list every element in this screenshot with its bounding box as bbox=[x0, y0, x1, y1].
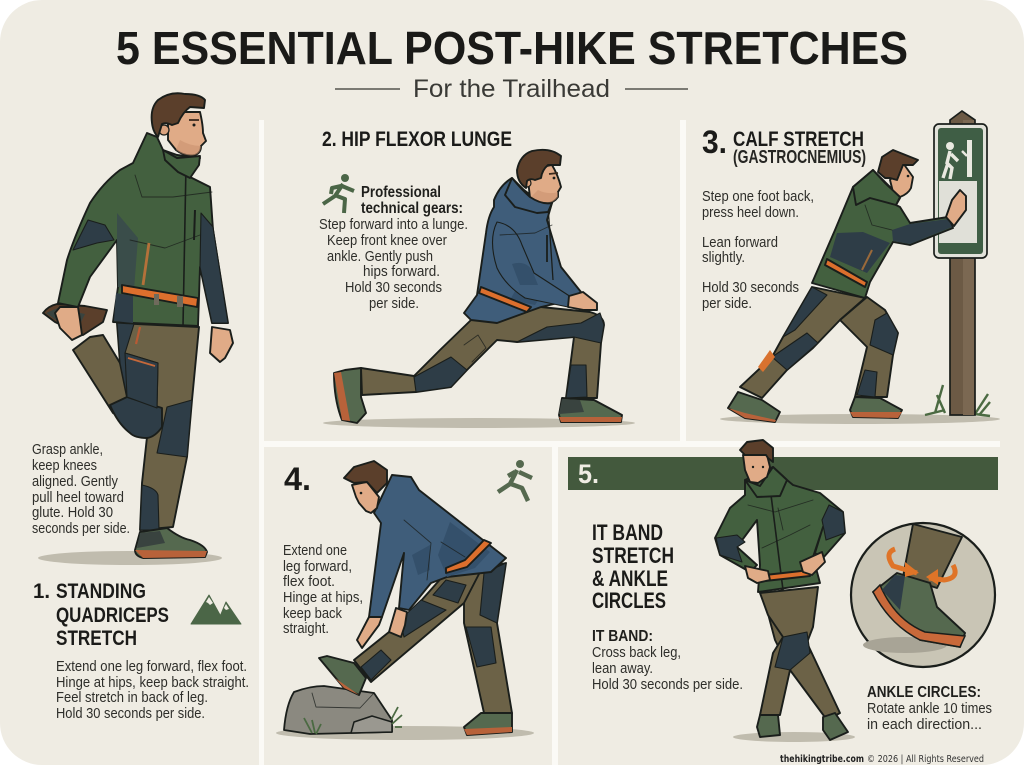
instructions: extend one leg: Feel stretch in back of leg. bbox=[56, 690, 208, 706]
number: 4: 4. bbox=[284, 461, 311, 497]
header bar bbox=[568, 457, 998, 490]
instructions: it band: lean away. bbox=[592, 661, 653, 677]
text: professional technical gears: Keep front knee over bbox=[327, 233, 447, 249]
title: 5 ESSENTIAL POST-HIKE STRETCHES bbox=[116, 22, 908, 74]
subtitle: For the Trailhead bbox=[413, 75, 610, 103]
instructions: extend one leg: Hinge at hips, keep back straight. bbox=[56, 675, 249, 691]
text: professional technical gears: ankle. Gently push bbox=[327, 249, 433, 265]
instructions: grasp ankle bbox=[32, 442, 130, 537]
panel: stretch 5 it band and ankle circles bbox=[568, 440, 998, 742]
icon: runner bbox=[498, 460, 532, 501]
instructions: grasp ankle: seconds per side. bbox=[32, 521, 130, 537]
figure: crossed legs bbox=[715, 440, 855, 742]
instructions: step one foot back bbox=[702, 189, 814, 312]
heading: it band stretch and ankle circles: STRETCH bbox=[592, 543, 674, 568]
ground shadow bbox=[720, 414, 1000, 424]
instructions: it band: Hold 30 seconds per side. bbox=[592, 677, 743, 693]
instructions: ankle circles bbox=[867, 684, 992, 733]
instructions: extend one leg: keep back bbox=[283, 606, 343, 622]
text: professional technical gears: Step forward into a lunge. bbox=[319, 217, 468, 233]
rock bbox=[284, 686, 402, 734]
text: professional technical gears: Hold 30 seconds bbox=[345, 280, 442, 296]
instructions: extend one leg: Hinge at hips, bbox=[283, 590, 363, 606]
instructions: step one foot back: Step one foot back, bbox=[702, 189, 814, 205]
instructions: grasp ankle: Grasp ankle, bbox=[32, 442, 103, 458]
heading: it band stretch and ankle circles: & ANKLE bbox=[592, 566, 668, 591]
instructions: it band bbox=[592, 628, 743, 693]
panel: stretch 3 calf stretch bbox=[702, 111, 1000, 424]
instructions: extend one leg: Hold 30 seconds per side. bbox=[56, 706, 205, 722]
heading: standing quadriceps stretch: 1. bbox=[33, 580, 50, 603]
instructions: grasp ankle: glute. Hold 30 bbox=[32, 505, 113, 521]
signpost bbox=[934, 111, 987, 415]
instructions: it band: Cross back leg, bbox=[592, 645, 681, 661]
figure: standing quad stretch bbox=[38, 93, 233, 565]
instructions: extend one leg bbox=[56, 659, 249, 722]
figure: forward hinge bbox=[319, 461, 512, 735]
instructions: extend one leg: Extend one bbox=[283, 543, 347, 559]
instructions: grasp ankle: keep knees bbox=[32, 458, 97, 474]
instructions: extend one leg: leg forward, bbox=[283, 559, 352, 575]
figure: calf stretch bbox=[728, 150, 966, 422]
panel: stretch 2 hip flexor lunge bbox=[319, 128, 635, 428]
icon: runner bbox=[323, 174, 354, 213]
heading: it band stretch and ankle circles: CIRCLES bbox=[592, 588, 666, 613]
instructions: step one foot back: slightly. bbox=[702, 250, 745, 266]
footer credit: © 2026 | All Rights Reserved bbox=[867, 754, 984, 765]
heading: it band stretch and ankle circles bbox=[592, 520, 674, 613]
heading: it band stretch and ankle circles: IT BAND bbox=[592, 520, 663, 545]
instructions: extend one leg: Extend one leg forward, flex foot. bbox=[56, 659, 247, 675]
instructions: ankle circles: ANKLE CIRCLES: bbox=[867, 684, 981, 701]
text: professional technical gears: hips forward. bbox=[363, 264, 440, 280]
instructions: step one foot back: Hold 30 seconds bbox=[702, 280, 799, 296]
instructions: extend one leg: flex foot. bbox=[283, 574, 335, 590]
instructions: extend one leg: straight. bbox=[283, 621, 329, 637]
icon: ankle circle inset bbox=[851, 523, 995, 667]
header bar: 5. bbox=[578, 459, 599, 489]
heading: standing quadriceps stretch bbox=[33, 580, 169, 650]
instructions: step one foot back: press heel down. bbox=[702, 205, 799, 221]
text: professional technical gears: technical gears: bbox=[361, 200, 463, 217]
heading: standing quadriceps stretch: STRETCH bbox=[56, 627, 137, 650]
ground shadow bbox=[276, 726, 534, 740]
heading: calf stretch: 3. bbox=[702, 124, 727, 160]
panel: stretch 1 standing quadriceps bbox=[32, 93, 249, 722]
icon: mountains bbox=[191, 595, 241, 624]
text: professional technical gears: Professional bbox=[361, 184, 441, 201]
instructions: ankle circles: in each direction... bbox=[867, 717, 982, 733]
heading: calf stretch: CALF STRETCH bbox=[733, 128, 864, 151]
icon: grass tufts bbox=[925, 385, 990, 416]
instructions: step one foot back: per side. bbox=[702, 296, 752, 312]
heading: standing quadriceps stretch: STANDING bbox=[56, 580, 146, 603]
footer credit: thehikingtribe.com bbox=[780, 754, 864, 765]
instructions: extend one leg bbox=[283, 543, 363, 637]
panel: stretch 4 hamstring bbox=[276, 460, 534, 740]
heading: hip flexor lunge: 2. HIP FLEXOR LUNGE bbox=[322, 128, 512, 151]
heading: calf stretch bbox=[702, 124, 866, 167]
footer credit bbox=[780, 754, 984, 765]
text: professional technical gears bbox=[319, 184, 468, 312]
heading: calf stretch: (GASTROCNEMIUS) bbox=[733, 147, 866, 167]
instructions: grasp ankle: aligned. Gently bbox=[32, 474, 119, 490]
instructions: step one foot back: Lean forward bbox=[702, 235, 778, 251]
heading: standing quadriceps stretch: QUADRICEPS bbox=[56, 604, 169, 627]
instructions: grasp ankle: pull heel toward bbox=[32, 490, 124, 506]
figure: lunge bbox=[323, 150, 635, 428]
instructions: ankle circles: Rotate ankle 10 times bbox=[867, 701, 992, 717]
text: professional technical gears: per side. bbox=[369, 296, 419, 312]
instructions: it band: IT BAND: bbox=[592, 628, 653, 645]
